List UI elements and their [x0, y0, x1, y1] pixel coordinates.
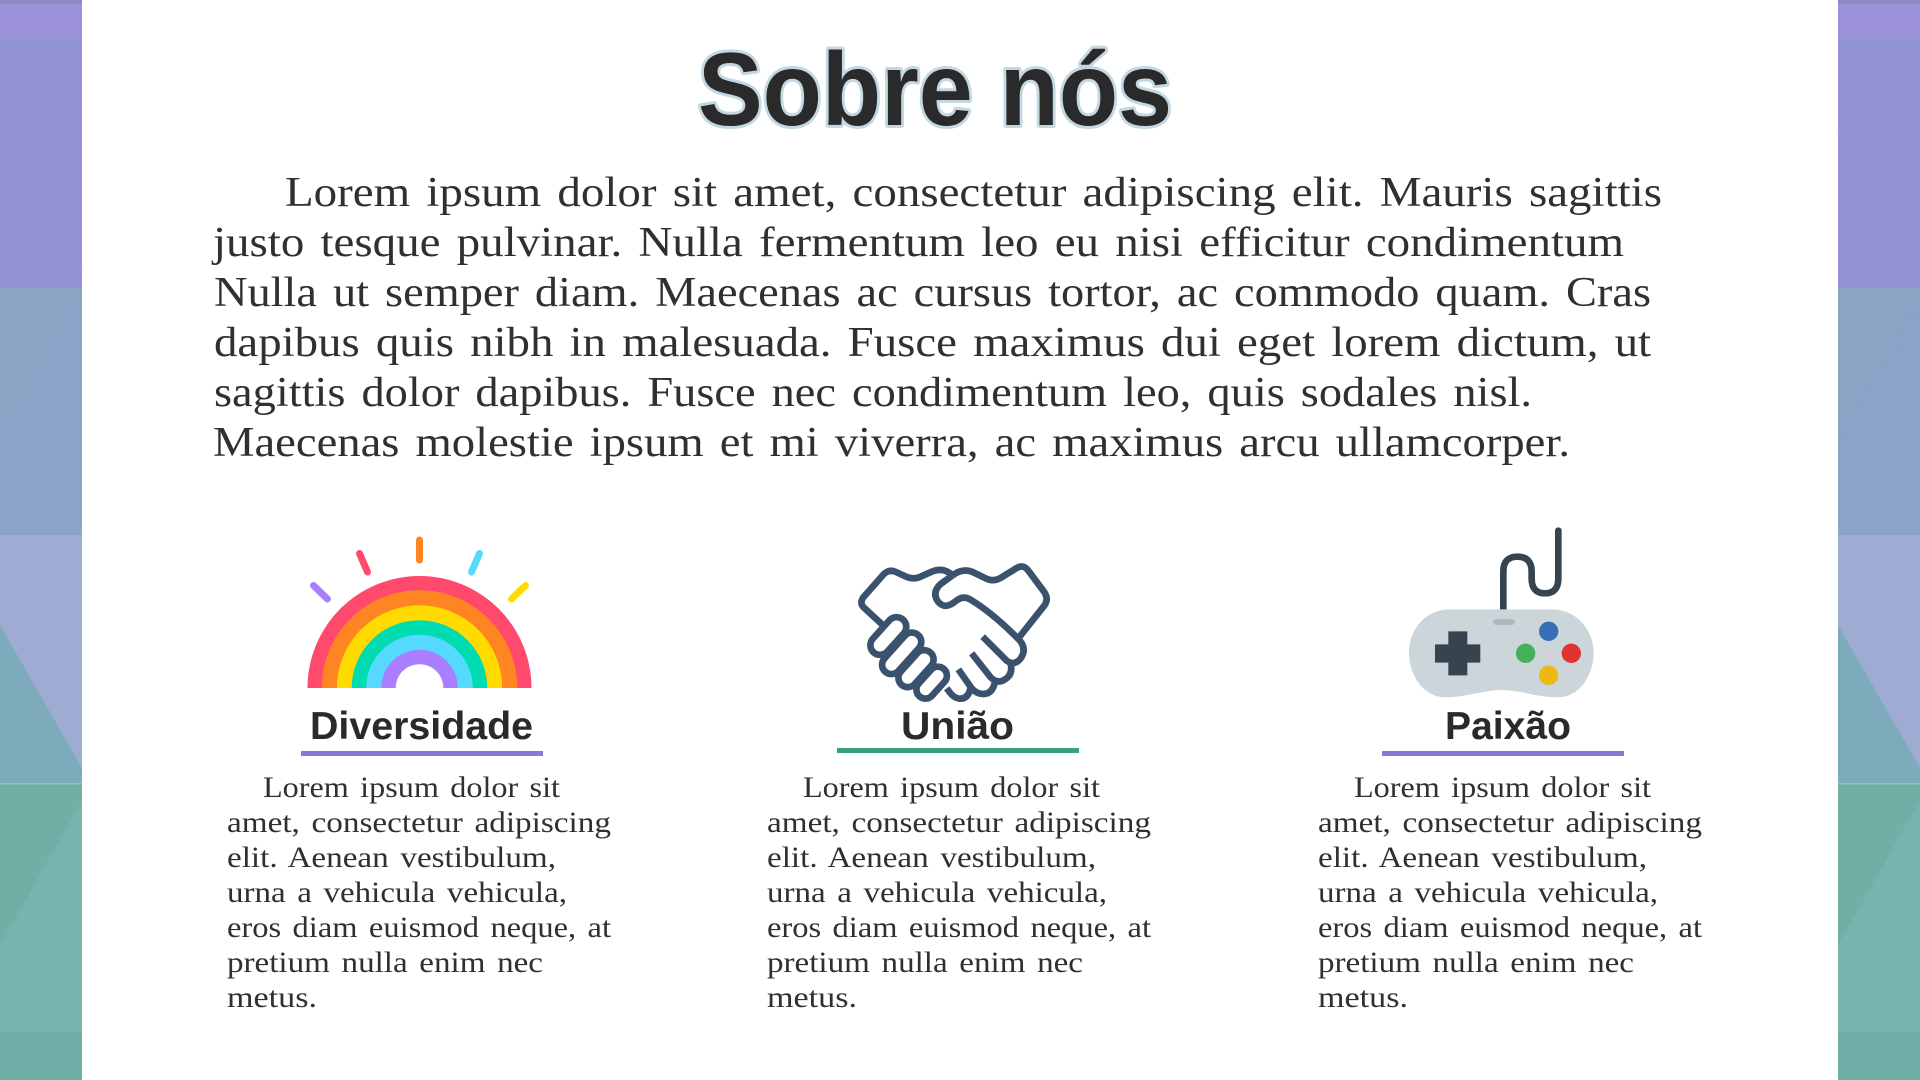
text block: pretium nulla enim nec — [1318, 947, 1634, 979]
text block: eros diam euismod neque, at — [767, 912, 1152, 944]
heading: Paixão: Paixão — [1445, 705, 1571, 748]
intro paragraph: Maecenas molestie ipsum et mi viverra, ac maximus arcu ullamcorper. — [213, 420, 1570, 466]
column: Diversidade — [227, 540, 612, 1014]
text block: urna a vehicula vehicula, — [1318, 877, 1658, 909]
text block — [227, 772, 612, 1014]
text block: metus. — [1318, 982, 1408, 1014]
text block: metus. — [227, 982, 317, 1014]
intro paragraph: Lorem ipsum dolor sit amet, consectetur adipiscing elit. Mauris sagittis — [285, 170, 1662, 216]
icon: handshake — [861, 566, 1047, 702]
column: Paixão — [1318, 531, 1703, 1014]
text block: Lorem ipsum dolor sit — [263, 772, 561, 804]
heading: Diversidade: Diversidade — [310, 705, 533, 748]
intro paragraph: sagittis dolor dapibus. Fusce nec condimentum leo, quis sodales nisl. — [214, 370, 1532, 416]
text block: elit. Aenean vestibulum, — [767, 842, 1096, 874]
text block: Lorem ipsum dolor sit — [803, 772, 1101, 804]
text block: metus. — [767, 982, 857, 1014]
intro paragraph: justo tesque pulvinar. Nulla fermentum leo eu nisi efficitur condimentum — [211, 220, 1624, 266]
underline — [837, 748, 1079, 753]
heading: União: União — [901, 705, 1014, 748]
text block: elit. Aenean vestibulum, — [1318, 842, 1647, 874]
underline — [1382, 751, 1624, 756]
underline — [301, 751, 543, 756]
intro paragraph: Nulla ut semper diam. Maecenas ac cursus tortor, ac commodo quam. Cras — [214, 270, 1651, 316]
text block — [767, 772, 1152, 1014]
text block: amet, consectetur adipiscing — [767, 807, 1151, 839]
icon: rainbow — [308, 540, 532, 688]
intro paragraph: dapibus quis nibh in malesuada. Fusce maximus dui eget lorem dictum, ut — [214, 320, 1651, 366]
column: União — [767, 566, 1152, 1014]
text block: urna a vehicula vehicula, — [227, 877, 567, 909]
title: Sobre nós — [698, 32, 1172, 148]
text block: Lorem ipsum dolor sit — [1354, 772, 1652, 804]
text block: pretium nulla enim nec — [227, 947, 543, 979]
background strip: right — [1838, 0, 1920, 1080]
icon: game controller — [1409, 531, 1594, 697]
text block: eros diam euismod neque, at — [1318, 912, 1703, 944]
text block: pretium nulla enim nec — [767, 947, 1083, 979]
intro paragraph — [211, 170, 1662, 466]
text block: amet, consectetur adipiscing — [1318, 807, 1702, 839]
text block: elit. Aenean vestibulum, — [227, 842, 556, 874]
text block: urna a vehicula vehicula, — [767, 877, 1107, 909]
background strip: left — [0, 0, 82, 1080]
text block: eros diam euismod neque, at — [227, 912, 612, 944]
text block — [1318, 772, 1703, 1014]
text block: amet, consectetur adipiscing — [227, 807, 611, 839]
